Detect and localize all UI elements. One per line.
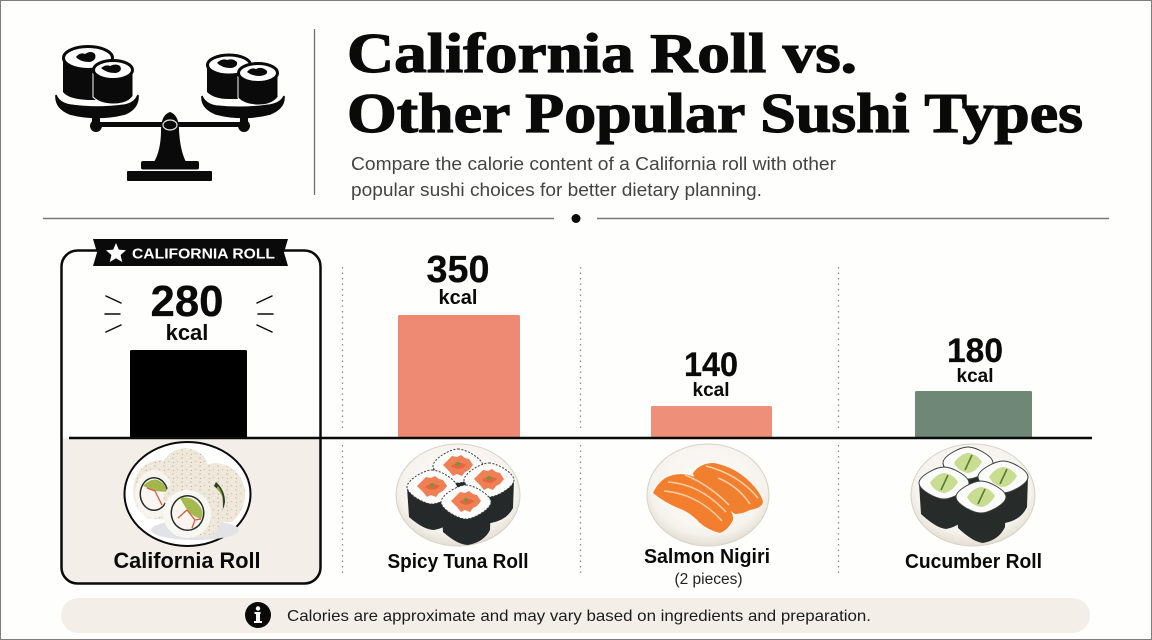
column: Cucumber Roll bbox=[905, 332, 1042, 573]
left rolls bbox=[63, 46, 133, 104]
ribbon badge bbox=[93, 239, 288, 266]
title: Other Popular Sushi Types bbox=[347, 83, 1083, 145]
icon: info bbox=[245, 602, 271, 628]
title bbox=[347, 23, 1083, 145]
front roll bbox=[163, 476, 223, 538]
photo: California Roll bbox=[124, 442, 250, 546]
footer note: Calories are approximate and may vary based on ingredients and preparation. bbox=[287, 608, 871, 625]
value: 180 kcal: 180 bbox=[947, 332, 1003, 370]
icon: balance scale with sushi rolls bbox=[56, 46, 284, 181]
left roll bbox=[133, 460, 190, 520]
back nigiri bbox=[725, 495, 755, 516]
section divider bbox=[43, 214, 1109, 223]
title: California Roll vs. bbox=[347, 23, 857, 85]
photo: Salmon Nigiri bbox=[647, 444, 769, 546]
label: Cucumber Roll: Cucumber Roll bbox=[905, 551, 1042, 573]
bar: Salmon Nigiri bbox=[651, 406, 772, 438]
card lower tint bbox=[62, 438, 320, 583]
right roll bbox=[192, 463, 245, 522]
right rolls bbox=[207, 55, 278, 105]
value: 140 kcal: kcal bbox=[693, 380, 729, 401]
back roll bbox=[163, 448, 208, 478]
emphasis ticks bbox=[105, 296, 273, 332]
front nigiri bbox=[653, 474, 733, 533]
value: 350 kcal: 350 bbox=[426, 249, 490, 291]
value: 350 kcal: kcal bbox=[439, 287, 477, 309]
label: Spicy Tuna Roll: Spicy Tuna Roll bbox=[388, 551, 528, 573]
card outline bbox=[62, 250, 320, 584]
value: 180 kcal: kcal bbox=[957, 366, 993, 387]
photo: Cucumber Roll bbox=[911, 444, 1035, 546]
bar: Spicy Tuna Roll bbox=[398, 315, 520, 438]
value: 280 kcal: 280 bbox=[150, 277, 224, 326]
subtitle bbox=[351, 153, 836, 200]
bar: California Roll bbox=[130, 350, 247, 438]
label: California Roll: California Roll bbox=[114, 548, 260, 573]
value: 140 kcal bbox=[684, 346, 738, 401]
label: Salmon Nigiri: (2 pieces) bbox=[674, 571, 743, 588]
pans bbox=[56, 95, 138, 118]
footer note bbox=[61, 598, 1090, 633]
subtitle: Compare the calorie content of a California roll with other bbox=[351, 153, 836, 174]
ribbon badge: CALIFORNIA ROLL bbox=[132, 246, 275, 262]
column: Salmon Nigiri bbox=[644, 346, 772, 588]
label: Salmon Nigiri: Salmon Nigiri bbox=[644, 546, 770, 568]
subtitle: popular sushi choices for better dietary planning. bbox=[351, 179, 762, 200]
bar: Cucumber Roll bbox=[915, 391, 1032, 438]
value: 350 kcal bbox=[426, 249, 490, 309]
value: 180 kcal bbox=[947, 332, 1003, 387]
photo: Spicy Tuna Roll bbox=[396, 444, 520, 546]
panel: California Roll highlight card bbox=[62, 239, 320, 584]
rice bbox=[660, 490, 722, 528]
stand bbox=[154, 112, 186, 162]
chart baseline bbox=[69, 437, 1092, 439]
beam bbox=[96, 122, 244, 127]
value: 280 kcal: kcal bbox=[166, 320, 208, 345]
dotted column separators bbox=[342, 267, 838, 575]
label: Salmon Nigiri bbox=[644, 546, 770, 588]
value: 140 kcal: 140 bbox=[684, 346, 738, 384]
header divider line bbox=[314, 29, 316, 195]
column: Spicy Tuna Roll bbox=[388, 249, 528, 573]
